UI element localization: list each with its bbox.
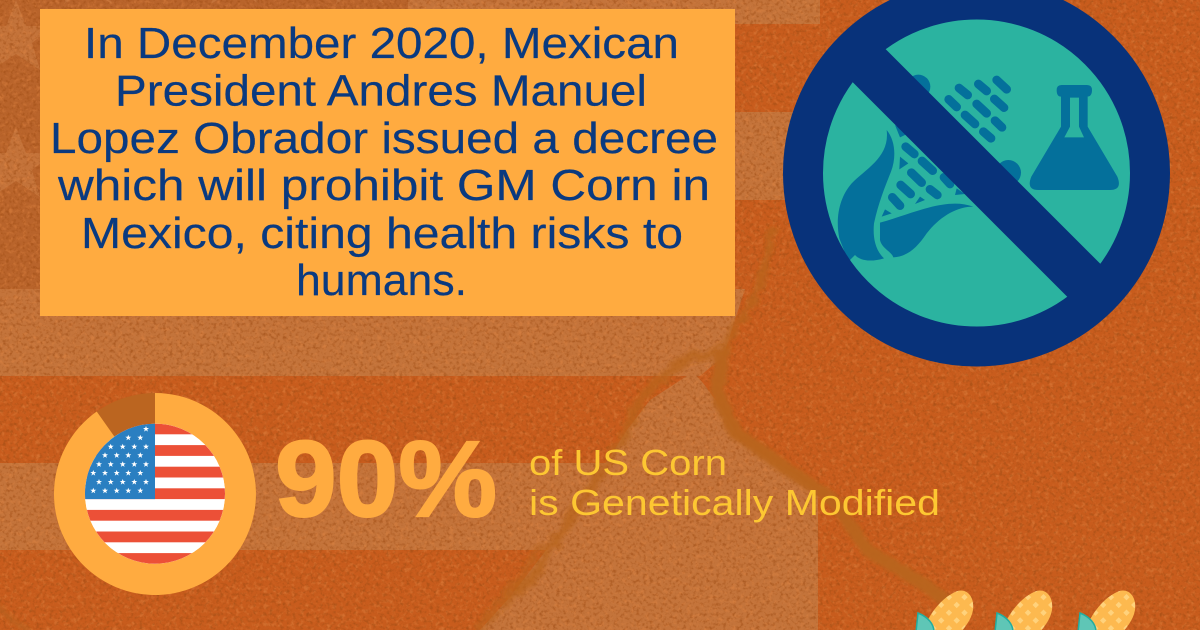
statistic: 90%: 90%: [275, 418, 497, 539]
statistic caption: is Genetically Modified: [529, 482, 940, 523]
icon: corn 2: [995, 591, 1052, 630]
donut chart with US flag: 90%: [54, 393, 256, 595]
icon: corn row: [916, 591, 1135, 630]
statistic caption: of US Corn: [529, 442, 727, 483]
text box: decree statement: Mexico, citing health risks to: [81, 209, 683, 258]
text box: decree statement: In December 2020, Mexican: [84, 19, 679, 68]
icon: corn 3: [1078, 591, 1135, 630]
text box: decree statement: humans.: [296, 256, 467, 305]
icon: no GM corn prohibition sign: [803, 0, 1150, 346]
icon: corn 1: [916, 591, 973, 630]
text box: decree statement: President Andres Manuel: [115, 67, 647, 116]
prohibition ring and slash: [803, 0, 1150, 346]
text box: decree statement: Lopez Obrador issued a decree: [50, 114, 718, 163]
text box: decree statement: which will prohibit GM Corn in: [57, 161, 710, 210]
text box: decree statement: [40, 9, 735, 316]
statistic caption: [529, 442, 940, 523]
icon: US flag: [85, 424, 225, 564]
icon: corn and flask: [838, 75, 1119, 262]
